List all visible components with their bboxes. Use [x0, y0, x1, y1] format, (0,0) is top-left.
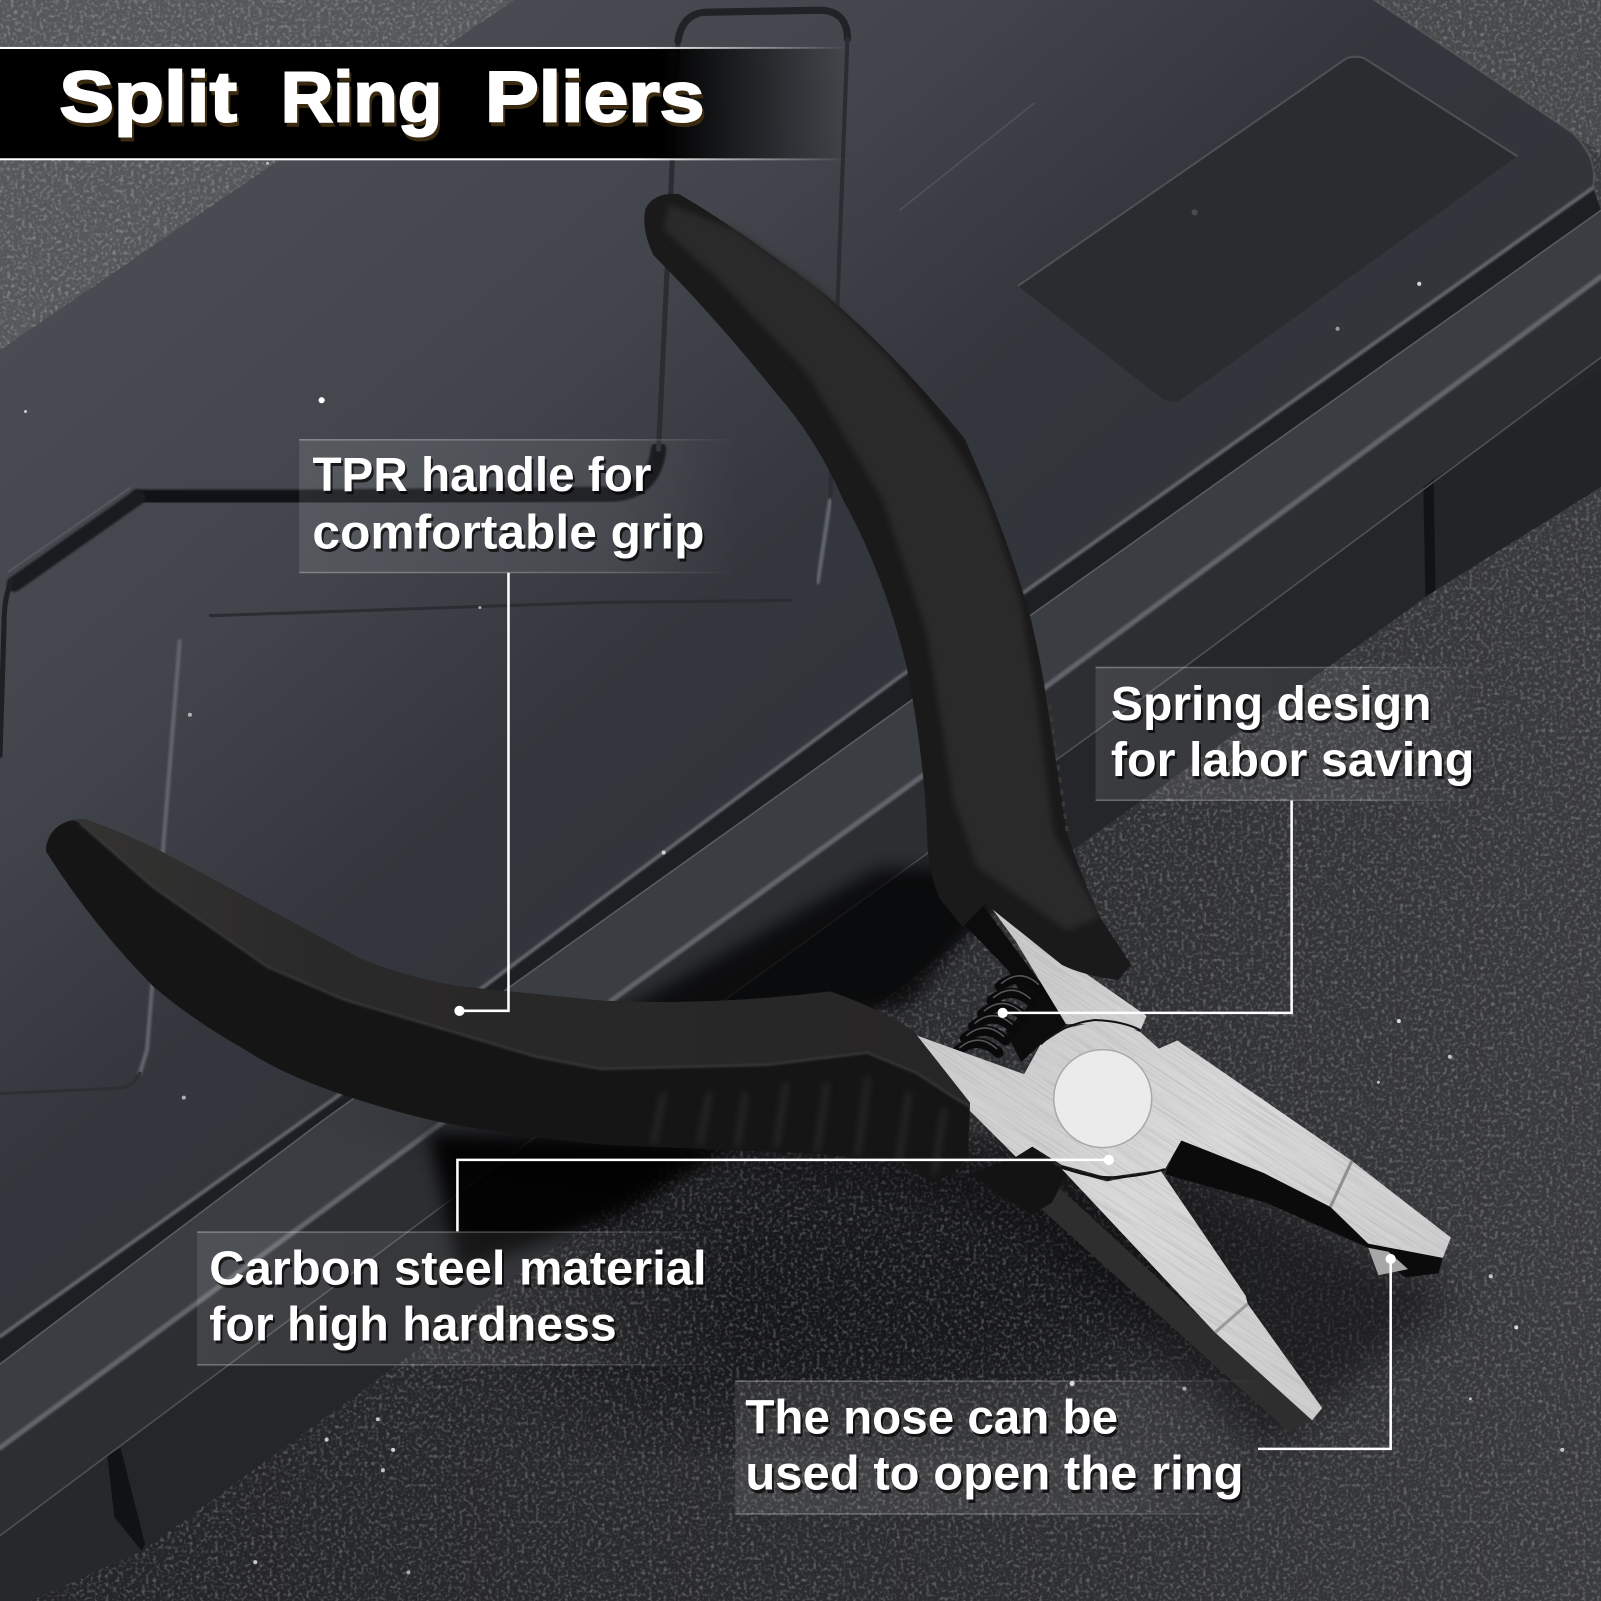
upper jaw dark side [1165, 1135, 1443, 1277]
lower handle [41, 807, 980, 1195]
callout: TPR handle: comfortable grip [312, 506, 705, 559]
callout: spring design: Spring design [1113, 681, 1434, 734]
foot shadow [107, 1448, 145, 1551]
title: Ring [281, 58, 442, 138]
callout: nose: The nose can be [747, 1395, 1120, 1448]
handle tang dark [970, 1147, 1067, 1215]
callout: carbon steel: for high hardness [211, 1302, 619, 1355]
case upper band [0, 210, 1601, 1448]
callout: TPR handle: TPR handle for [314, 452, 653, 505]
grip teeth [1050, 705, 1068, 837]
callout: nose: The nose can be [745, 1392, 1118, 1445]
case surface specks [24, 162, 1421, 1100]
case corner foot [0, 1455, 142, 1601]
callout: TPR handle: TPR handle for [312, 449, 651, 502]
pivot edge [1040, 1020, 1165, 1177]
upper handle facet [664, 204, 1100, 930]
title: Pliers [485, 58, 705, 138]
leader: TPR handle [454, 573, 508, 1016]
steel body [914, 908, 1451, 1420]
lower handle upper facet [73, 819, 970, 1107]
callout: spring design [1096, 667, 1484, 801]
title band [0, 47, 847, 160]
lower jaw step [1215, 1304, 1248, 1332]
callout: TPR handle: comfortable grip [314, 509, 707, 562]
title [59, 58, 705, 138]
case lower band [0, 277, 1601, 1536]
ring opening tab [1368, 1248, 1408, 1275]
lower jaw dark side [1034, 1185, 1312, 1433]
pliers [41, 194, 1576, 1518]
brushed finish [920, 924, 1450, 1414]
block edge shadow [1423, 480, 1436, 596]
title: Split [59, 58, 237, 138]
leader: spring design [998, 800, 1292, 1018]
callout: nose: used to open the ring [745, 1448, 1244, 1501]
callout: carbon steel [197, 1231, 738, 1366]
title shadow: Ring [283, 62, 444, 142]
leader: nose [1258, 1254, 1396, 1449]
case bottom wall [0, 357, 1601, 1551]
title shadow [61, 62, 707, 142]
callout: carbon steel: for high hardness [209, 1299, 617, 1352]
spring [958, 976, 1040, 1053]
jaw steps [1330, 1161, 1352, 1207]
callout: TPR handle [299, 439, 738, 573]
leader: carbon steel [457, 1155, 1114, 1231]
callout: carbon steel: Carbon steel material [209, 1242, 707, 1295]
callout: spring design: Spring design [1111, 678, 1432, 731]
case groove [0, 188, 1601, 1364]
facet edge [80, 823, 970, 1107]
title shadow: Split [61, 62, 239, 142]
callout: spring design: for labor saving [1111, 734, 1474, 787]
grip ribs [653, 1077, 944, 1174]
case outer moulded ridge [0, 10, 847, 756]
title shadow: Pliers [487, 62, 707, 142]
case inner moulded panel [0, 600, 790, 1094]
upper arm dark side [964, 905, 1070, 1062]
floor specks [253, 1019, 1564, 1574]
callout: spring design: for labor saving [1113, 737, 1476, 790]
callout: nose: used to open the ring [747, 1451, 1246, 1504]
right protruding block [1432, 370, 1601, 590]
callout: carbon steel: Carbon steel material [211, 1246, 709, 1299]
upper handle [644, 194, 1131, 980]
case recessed label [1018, 57, 1517, 402]
callout: nose [735, 1380, 1266, 1515]
pivot rivet [1054, 1050, 1152, 1148]
shadows under pliers [306, 868, 1460, 1450]
